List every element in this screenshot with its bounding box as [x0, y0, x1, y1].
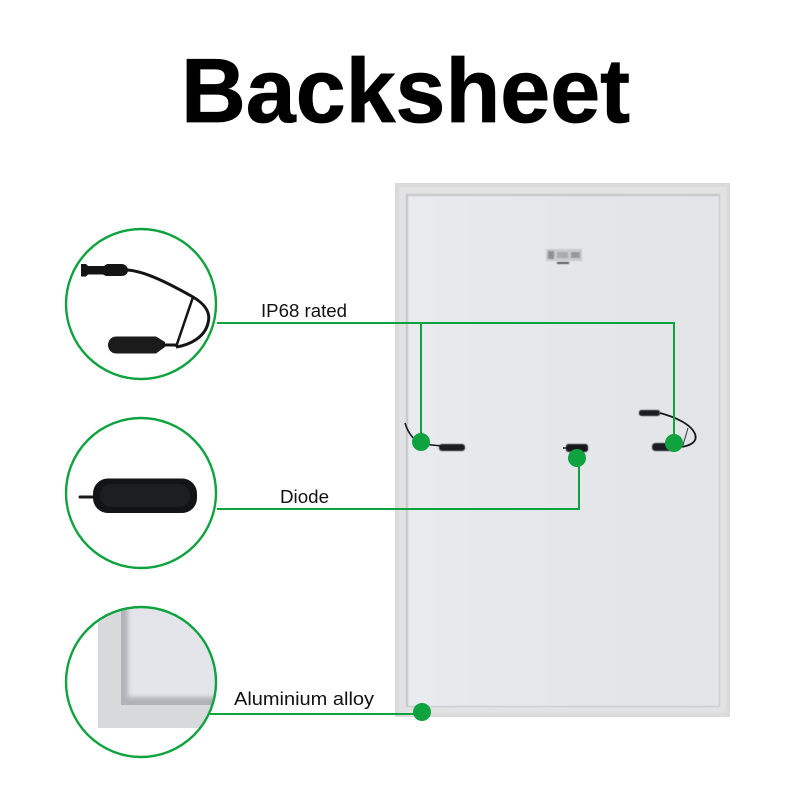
title: Backsheet [181, 41, 630, 142]
callout: Diode: Diode [280, 487, 329, 507]
icon: diode [80, 478, 197, 513]
left connector on panel [405, 423, 465, 451]
label plate [546, 249, 582, 264]
diode on panel [563, 444, 588, 452]
callout: IP68 rated [217, 301, 683, 452]
callout: Diode [217, 449, 586, 509]
callout: Aluminium alloy: Aluminium alloy [234, 689, 374, 709]
callout: Aluminium alloy [210, 689, 431, 721]
callout: IP68 rated: IP68 rated [261, 301, 347, 321]
icon: connector with cable [81, 264, 209, 354]
circle: IP68 connector detail [66, 229, 216, 379]
panel: solar module backsheet [395, 183, 730, 717]
circle: aluminium frame detail [64, 606, 218, 758]
right connector on panel [639, 410, 696, 451]
circle: diode detail [66, 418, 216, 568]
